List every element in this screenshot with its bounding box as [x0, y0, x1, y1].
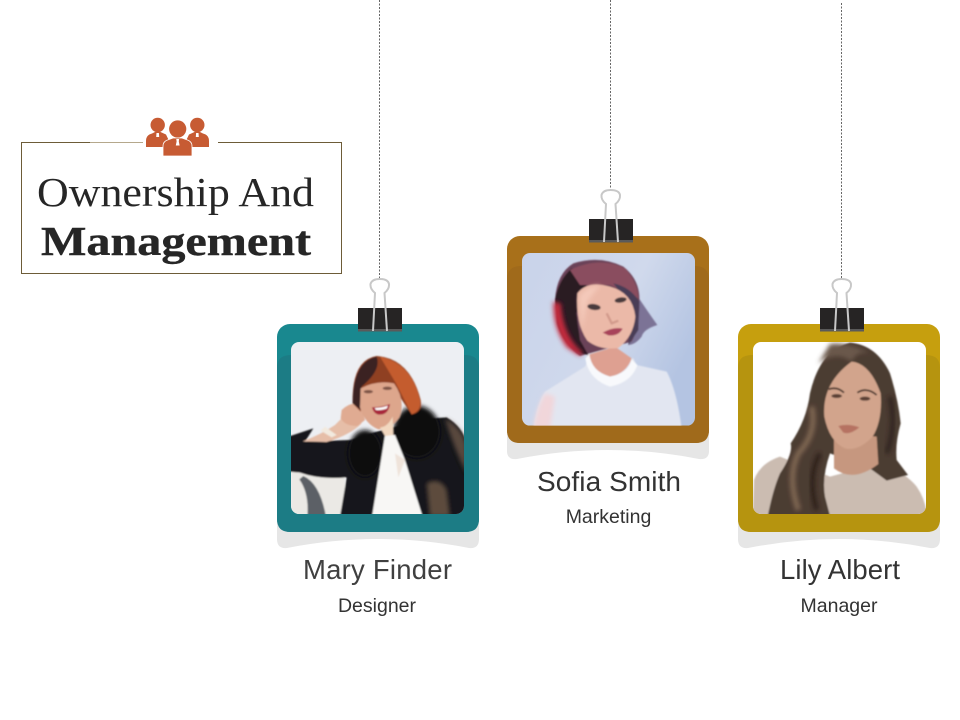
frame shading	[507, 266, 709, 443]
name: Sofia Smith	[537, 466, 681, 497]
binder clip	[589, 190, 633, 242]
card shadow	[277, 520, 479, 548]
card frame	[507, 236, 709, 443]
card shadow	[738, 520, 940, 548]
title line 1: Ownership And	[37, 169, 314, 215]
frame shading	[738, 355, 940, 532]
title line 2: Management	[41, 218, 311, 264]
portrait photo	[753, 342, 927, 518]
frame shading	[277, 355, 479, 532]
card frame	[738, 324, 940, 532]
card: Lily Albert	[738, 279, 940, 617]
role: Manager	[801, 595, 878, 617]
role: Designer	[338, 595, 417, 617]
portrait photo	[288, 342, 467, 517]
name: Lily Albert	[780, 554, 900, 585]
card: Mary Finder	[277, 279, 479, 617]
hanging thread 2	[610, 0, 612, 192]
card frame	[277, 324, 479, 532]
hanging thread 3	[840, 3, 842, 280]
hanging thread 1	[378, 0, 380, 280]
portrait photo	[522, 253, 695, 428]
card: Sofia Smith	[507, 190, 709, 528]
title panel	[22, 118, 342, 274]
role: Marketing	[566, 506, 651, 528]
frame highlight	[90, 142, 143, 143]
title frame	[22, 142, 342, 274]
binder clip	[820, 279, 864, 332]
icon: team of three people	[146, 118, 209, 156]
card shadow	[507, 430, 709, 459]
name: Mary Finder	[303, 554, 452, 585]
binder clip	[358, 279, 402, 332]
